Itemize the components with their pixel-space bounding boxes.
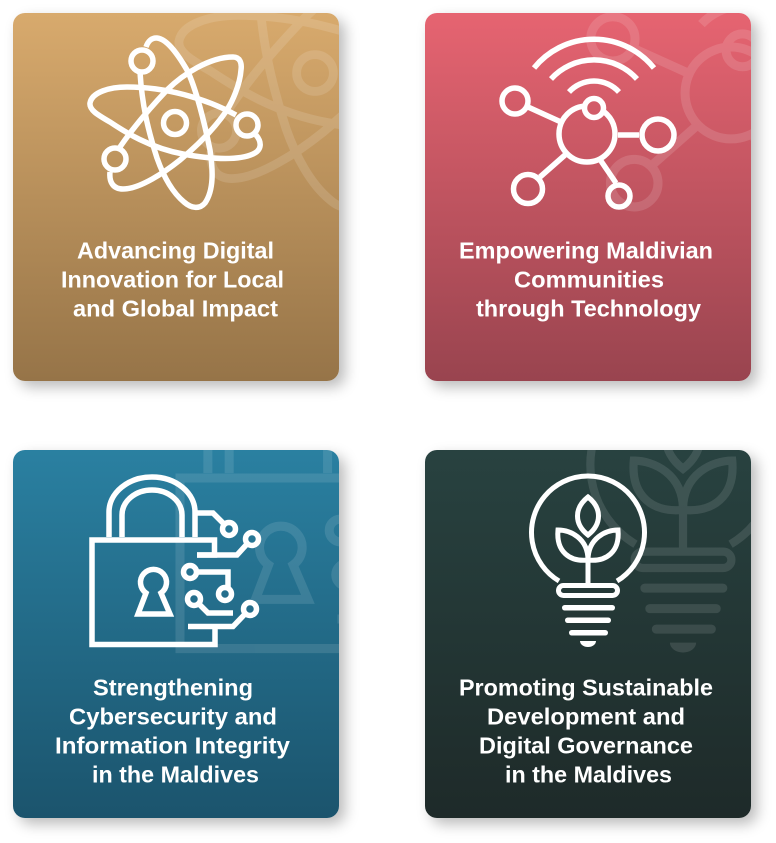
heading: sustainable development: in the Maldives	[505, 762, 672, 788]
panel: cybersecurity	[13, 450, 339, 818]
icon: atom	[90, 38, 260, 207]
icon: padlock with circuit	[92, 477, 258, 644]
panel: digital innovation	[13, 13, 339, 381]
heading: digital innovation: Innovation for Local	[61, 266, 284, 292]
heading: empowering communities: through Technology	[476, 296, 701, 322]
heading: sustainable development: Promoting Sustainable	[459, 674, 713, 700]
background icon: bulb watermark	[590, 372, 776, 652]
heading: sustainable development	[459, 674, 713, 788]
icon: light bulb with plant	[532, 476, 644, 647]
heading: sustainable development: Digital Governance	[479, 732, 693, 758]
icon: wireless network	[502, 39, 674, 207]
heading: empowering communities	[459, 238, 713, 322]
heading: cybersecurity: Information Integrity	[55, 732, 290, 758]
background icon: atom watermark	[179, 0, 451, 208]
panel: sustainable development	[425, 450, 751, 818]
heading: empowering communities: Communities	[514, 266, 664, 292]
background icon: network watermark	[591, 0, 776, 214]
panel: empowering communities	[425, 13, 751, 381]
heading: sustainable development: Development and	[487, 704, 685, 730]
heading: digital innovation	[61, 238, 284, 322]
heading: cybersecurity: Cybersecurity and	[69, 704, 277, 730]
heading: digital innovation: Advancing Digital	[77, 238, 274, 264]
heading: empowering communities: Empowering Maldivian	[459, 238, 713, 264]
heading: digital innovation: and Global Impact	[73, 296, 278, 322]
heading: cybersecurity: Strengthening	[93, 674, 253, 700]
background icon: padlock watermark	[180, 375, 454, 649]
heading: cybersecurity: in the Maldives	[92, 762, 259, 788]
heading: cybersecurity	[55, 674, 290, 788]
